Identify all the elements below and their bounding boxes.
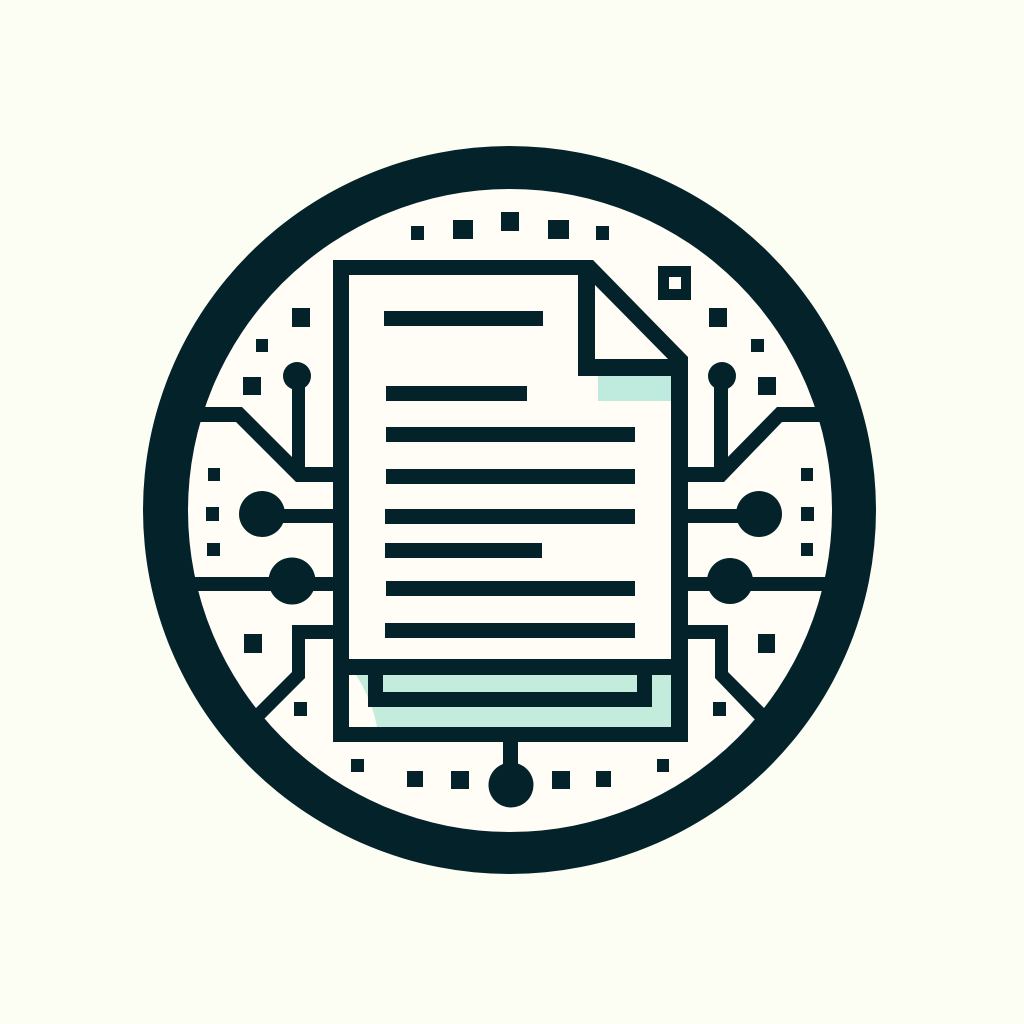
circuit nodes right: [707, 362, 782, 604]
circle ring: [143, 146, 876, 874]
hollow square: [658, 266, 691, 300]
circuit nodes left: [239, 362, 316, 604]
bottom connector with node: [488, 740, 534, 808]
text lines: [384, 311, 635, 638]
circuit traces right: [686, 376, 830, 728]
circuit traces left: [190, 376, 335, 728]
decorative square dots: [206, 212, 814, 789]
page fold: [595, 285, 668, 359]
bottom band: [349, 675, 671, 727]
page body: [349, 275, 671, 659]
document: [333, 260, 688, 742]
mint highlight under fold: [598, 376, 671, 401]
